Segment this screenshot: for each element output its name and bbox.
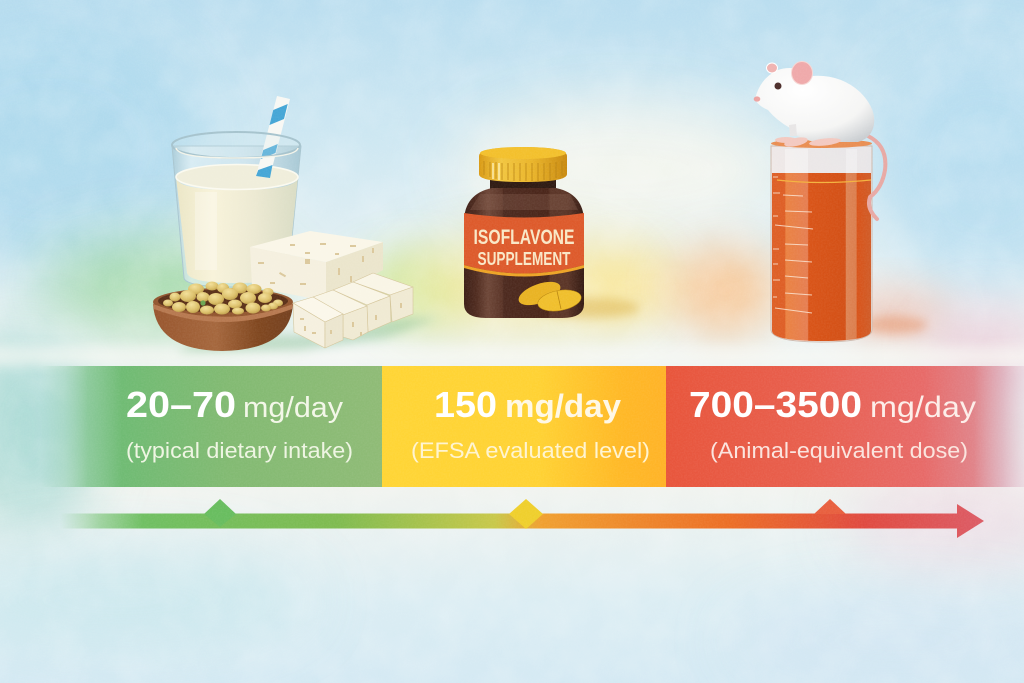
bottle label: SUPPLEMENT (478, 249, 571, 269)
dose value: 20–70 (126, 384, 236, 425)
dose band: dietary intake (40, 366, 382, 487)
straw (256, 96, 290, 178)
dose caption: (EFSA evaluated level) (411, 438, 650, 463)
ears (766, 62, 812, 84)
dose caption: (typical dietary intake) (126, 438, 353, 463)
dose unit: mg/day (870, 391, 976, 424)
illustration: beaker with orange liquid (771, 139, 872, 342)
bottle label: ISOFLAVONE (474, 226, 574, 249)
large tofu block (250, 231, 383, 301)
dose unit: mg/day (243, 392, 344, 424)
illustration: soy milk glass (172, 96, 301, 287)
tofu flecks (300, 303, 402, 336)
tail (868, 136, 885, 219)
beaker scale (773, 177, 813, 313)
paws (775, 136, 841, 148)
marker: animal (814, 499, 846, 514)
illustration: bowl of soybeans (153, 282, 293, 351)
illustration: tofu (250, 231, 413, 348)
soybeans (163, 282, 283, 314)
marker: dietary (204, 499, 236, 527)
dose unit: mg/day (505, 388, 621, 424)
marker: EFSA (509, 499, 543, 529)
dose arrow (60, 499, 984, 538)
illustration: supplement bottle (464, 147, 584, 318)
dose value: 700–3500 (689, 384, 862, 425)
bottle label (464, 213, 584, 276)
illustration: white mouse (754, 62, 885, 219)
dose band: EFSA level (382, 366, 666, 487)
dose caption: (Animal-equivalent dose) (710, 438, 968, 463)
mouse body (755, 68, 874, 142)
tofu slices (293, 273, 413, 348)
dose value: 150 (434, 384, 497, 425)
capsules (516, 277, 583, 314)
milk (176, 177, 298, 283)
ground shadows (175, 298, 927, 352)
cap (479, 147, 567, 182)
dose band: animal-equivalent (666, 366, 1024, 487)
